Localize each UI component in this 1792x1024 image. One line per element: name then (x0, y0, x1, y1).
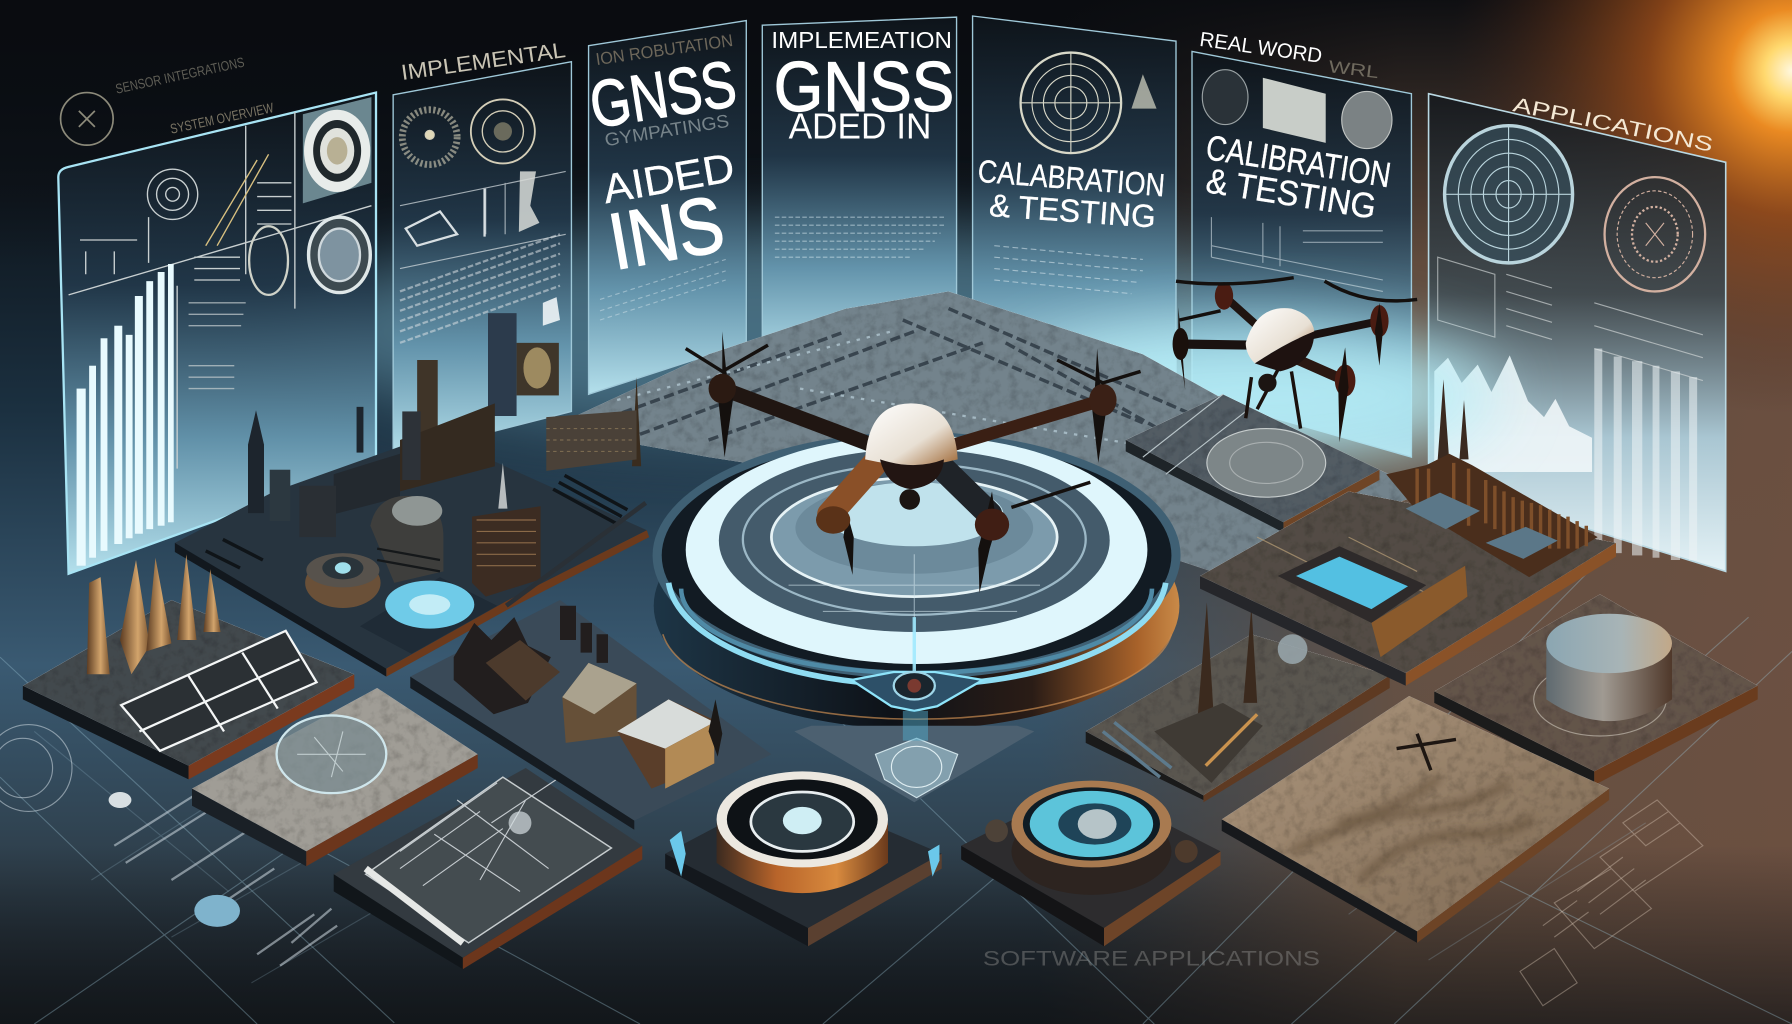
bar chart (77, 264, 174, 566)
arms (722, 389, 1103, 514)
solar array (121, 631, 317, 751)
spires (87, 554, 221, 674)
heading: testing: & TESTING (1203, 162, 1379, 227)
tile: spires on base (1086, 602, 1390, 802)
panel 6 charts (1211, 217, 1383, 291)
body (865, 403, 958, 465)
tile: stone circle (192, 688, 478, 866)
heading: implementation: IMPLEMEATION (771, 27, 952, 53)
area chart (1434, 355, 1592, 472)
panel 1 upper faint text: SENSOR INTEGRATIONS (114, 55, 246, 97)
rotors (709, 331, 1117, 593)
data table (1594, 349, 1697, 560)
left city block (175, 313, 649, 677)
glow behind terrain (1017, 326, 1497, 463)
small diagrams (1438, 257, 1703, 381)
panel 1 schematics (69, 112, 371, 469)
heading: calibration: CALIBRATION (1203, 129, 1393, 196)
floor schematic: right (1520, 800, 1703, 1006)
lens block (305, 553, 381, 608)
tile: cylinder base (1434, 594, 1758, 785)
model city cluster (454, 606, 608, 714)
heading: real word: REAL WORD (1198, 28, 1324, 68)
heading: GNSS large: GNSS (774, 48, 954, 127)
heading: INS: INS (602, 179, 730, 287)
heading: applications: APPLICATIONS (1511, 93, 1715, 157)
panel: calibration and testing one (973, 16, 1176, 389)
tile: calibration map right (1126, 394, 1379, 533)
radar sketch (1021, 53, 1121, 153)
copper lens (665, 771, 942, 946)
heading faint tag: WRL (1328, 56, 1380, 82)
icon: compass badge (61, 93, 113, 145)
footer label: SOFTWARE APPLICATIONS (983, 946, 1320, 971)
tan buildings (562, 663, 722, 789)
tile: sand terrain (1222, 696, 1609, 943)
rotors 2 (1173, 282, 1389, 442)
icon: ring image lower (309, 217, 370, 293)
panel: implementation (393, 37, 571, 457)
heading: AIDED: AIDED (599, 145, 738, 213)
panel 2 diagrams and text lines (400, 171, 566, 343)
panel: GNSS aided INS (585, 21, 746, 394)
heading: top faint: ION ROBUTATION (594, 30, 734, 69)
detail slats (206, 475, 627, 568)
panel 2 radial sketches (402, 99, 535, 165)
panel: implementation GNSS (762, 17, 957, 366)
city model right (1386, 379, 1598, 577)
skyline towers (248, 313, 641, 537)
badge: platform connector (851, 672, 983, 711)
cylinder (1546, 614, 1672, 721)
floor schematic lines (0, 560, 1792, 1024)
dome building (370, 496, 443, 583)
panel 5 text lines (994, 246, 1143, 294)
body 2 (1246, 308, 1314, 363)
radar 1 (1445, 126, 1573, 263)
heading: GNSS: GNSS (585, 46, 741, 142)
panel 3 text lines (600, 259, 726, 320)
second drone (1173, 278, 1417, 442)
tile: middle city (410, 600, 771, 830)
heading: aided in: ADED IN (789, 105, 931, 146)
heading: faint subtitle: GYMPATINGS (603, 110, 731, 150)
panel 1 header text: SYSTEM OVERVIEW (169, 100, 275, 137)
back terrain map (549, 291, 1429, 571)
icon: ring image (303, 97, 371, 203)
heading: calabration: CALABRATION (977, 153, 1166, 203)
tile: shield (794, 711, 1034, 802)
radar 2 (1605, 177, 1705, 291)
tile: technical map (334, 768, 642, 969)
image thumbnails (1202, 70, 1392, 149)
panel 4 text lines (775, 217, 946, 257)
blue lens screen (360, 577, 497, 654)
panel: applications (1429, 93, 1726, 571)
panel: overview with chart (58, 55, 376, 574)
blue screen (1278, 546, 1426, 623)
tile: solar panel (23, 554, 354, 779)
front building (472, 463, 541, 597)
panel: real world calibration (1192, 28, 1411, 457)
main drone (686, 331, 1141, 593)
central disc platform (653, 432, 1181, 729)
floor schematic: left (0, 725, 337, 966)
blue lens (961, 781, 1221, 946)
heading: testing: & TESTING (988, 187, 1157, 235)
tile: screen console (1200, 379, 1616, 686)
panel 2 heading: IMPLEMENTAL (400, 37, 567, 85)
